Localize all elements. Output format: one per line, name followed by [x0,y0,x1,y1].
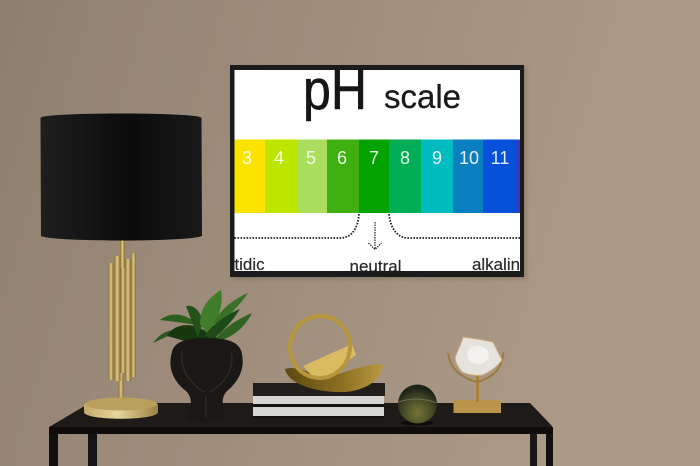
acidic bracket [234,214,359,238]
ring [283,310,357,384]
agate stand [448,337,504,413]
title: scale [384,78,461,115]
inner flare [303,344,356,378]
panel: framed pH scale poster [230,58,526,279]
lamp shade [40,114,202,240]
pot hand highlights [182,352,232,418]
labels [234,255,520,276]
agate centre [467,346,489,364]
scale numbers: 10 [459,148,479,168]
colour scale bands [234,140,520,213]
table legs [49,434,58,466]
leaves [153,290,252,343]
neutral arrow [368,222,382,250]
gold sculpture [283,310,383,392]
scale numbers [242,148,509,168]
lamp [40,114,202,419]
agate slice [455,337,502,375]
scale numbers: 6 [337,148,347,168]
labels: alkalin [472,255,520,274]
pot [170,338,243,421]
title: pH [303,58,367,122]
table [49,403,553,466]
scale numbers: 5 [306,148,316,168]
stacked books [253,383,385,418]
potted plant [153,290,252,421]
bowl [285,364,383,392]
scale numbers: 8 [400,148,410,168]
scale numbers: 3 [242,148,252,168]
stand arc [448,352,504,382]
scale numbers: 4 [274,148,284,168]
lamp tubes [108,253,136,381]
lamp stem [120,238,125,268]
glass orb [398,384,437,426]
labels: tidic [234,255,265,274]
scale numbers: 9 [432,148,442,168]
table top [49,403,552,434]
labels: neutral [350,257,402,276]
title [303,58,461,122]
lamp base [84,399,158,419]
scale numbers: 11 [491,148,509,168]
stand base [454,400,501,413]
alkaline bracket [389,214,520,238]
scale numbers: 7 [369,148,379,168]
